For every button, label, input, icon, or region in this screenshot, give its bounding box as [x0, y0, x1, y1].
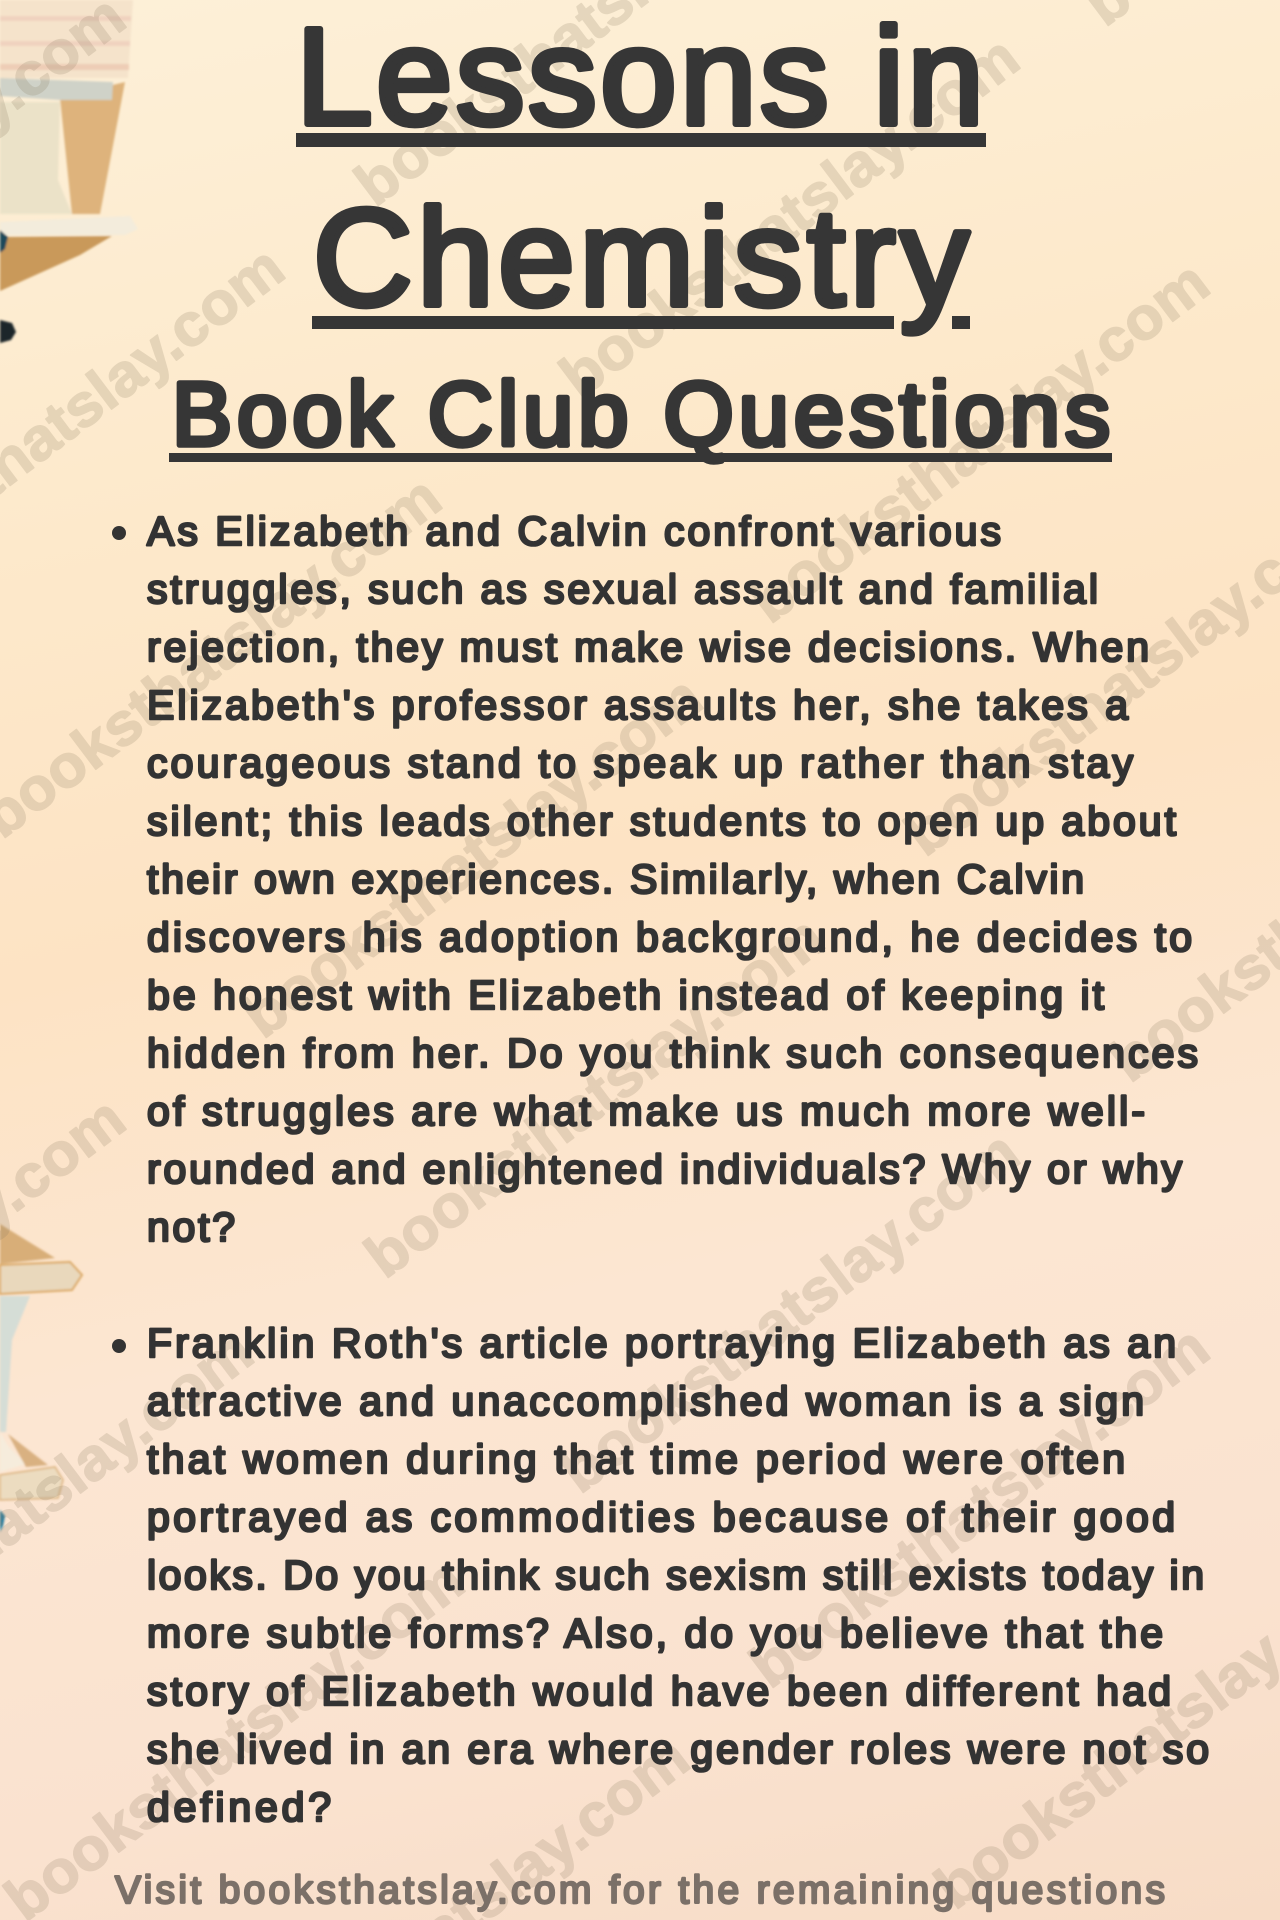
question 1: not? [147, 1204, 235, 1250]
question 2: more subtle forms? Also, do you believe that the [147, 1610, 1163, 1656]
bullet [112, 526, 126, 540]
question 2: she lived in an era where gender roles were not so [147, 1726, 1209, 1772]
question 1: of struggles are what make us much more well- [147, 1088, 1145, 1134]
footer call to action: Visit booksthatslay.com for the remaining questions [115, 1869, 1165, 1912]
question 1: rounded and enlightened individuals? Why or why [147, 1146, 1182, 1192]
watermark pattern: booksthatslay.com [738, 248, 1221, 635]
watermark pattern: booksthatslay.com [548, 1118, 1031, 1505]
question 2: portrayed as commodities because of their good [147, 1494, 1175, 1540]
question 1: struggles, such as sexual assault and familial [147, 566, 1098, 612]
subtitle: Book Club Questions: Book Club Questions [172, 365, 1110, 465]
question 2: Franklin Roth's article portraying Elizabeth as an [147, 1320, 1176, 1366]
watermark pattern: booksthatslay.com [353, 903, 836, 1290]
question 1 [112, 508, 1198, 1250]
question 1: Elizabeth's professor assaults her, she takes a [147, 682, 1128, 728]
question 2: that women during that time period were often [147, 1436, 1125, 1482]
illustration: stacked books lower left [0, 1224, 82, 1532]
bullet [112, 1339, 126, 1353]
question 2: attractive and unaccomplished woman is a sign [147, 1378, 1144, 1424]
question 1: their own experiences. Similarly, when Calvin [147, 856, 1084, 902]
question 2: defined? [147, 1784, 331, 1830]
question 2 [112, 1320, 1209, 1830]
watermark pattern: booksthatslay.com [548, 23, 1031, 410]
question 1: As Elizabeth and Calvin confront various [147, 508, 1001, 554]
question 1: courageous stand to speak up rather than stay [147, 740, 1134, 786]
question 1: rejection, they must make wise decisions. When [147, 624, 1149, 670]
question 2: story of Elizabeth would have been different had [147, 1668, 1171, 1714]
title: Chemistry: Chemistry [313, 181, 969, 335]
question 1: silent; this leads other students to open up about [147, 798, 1177, 844]
illustration: stacked books top left [0, 0, 138, 343]
title: Lessons in: Lessons in [296, 0, 984, 154]
watermark pattern: booksthatslay.com [231, 663, 714, 1050]
watermark pattern: booksthatslay.com [738, 1313, 1221, 1700]
question 1: discovers his adoption background, he decides to [147, 914, 1192, 960]
question 1: hidden from her. Do you think such consequences [147, 1030, 1198, 1076]
question 2: looks. Do you think such sexism still exists today in [147, 1552, 1204, 1598]
question 1: be honest with Elizabeth instead of keeping it [147, 972, 1105, 1018]
